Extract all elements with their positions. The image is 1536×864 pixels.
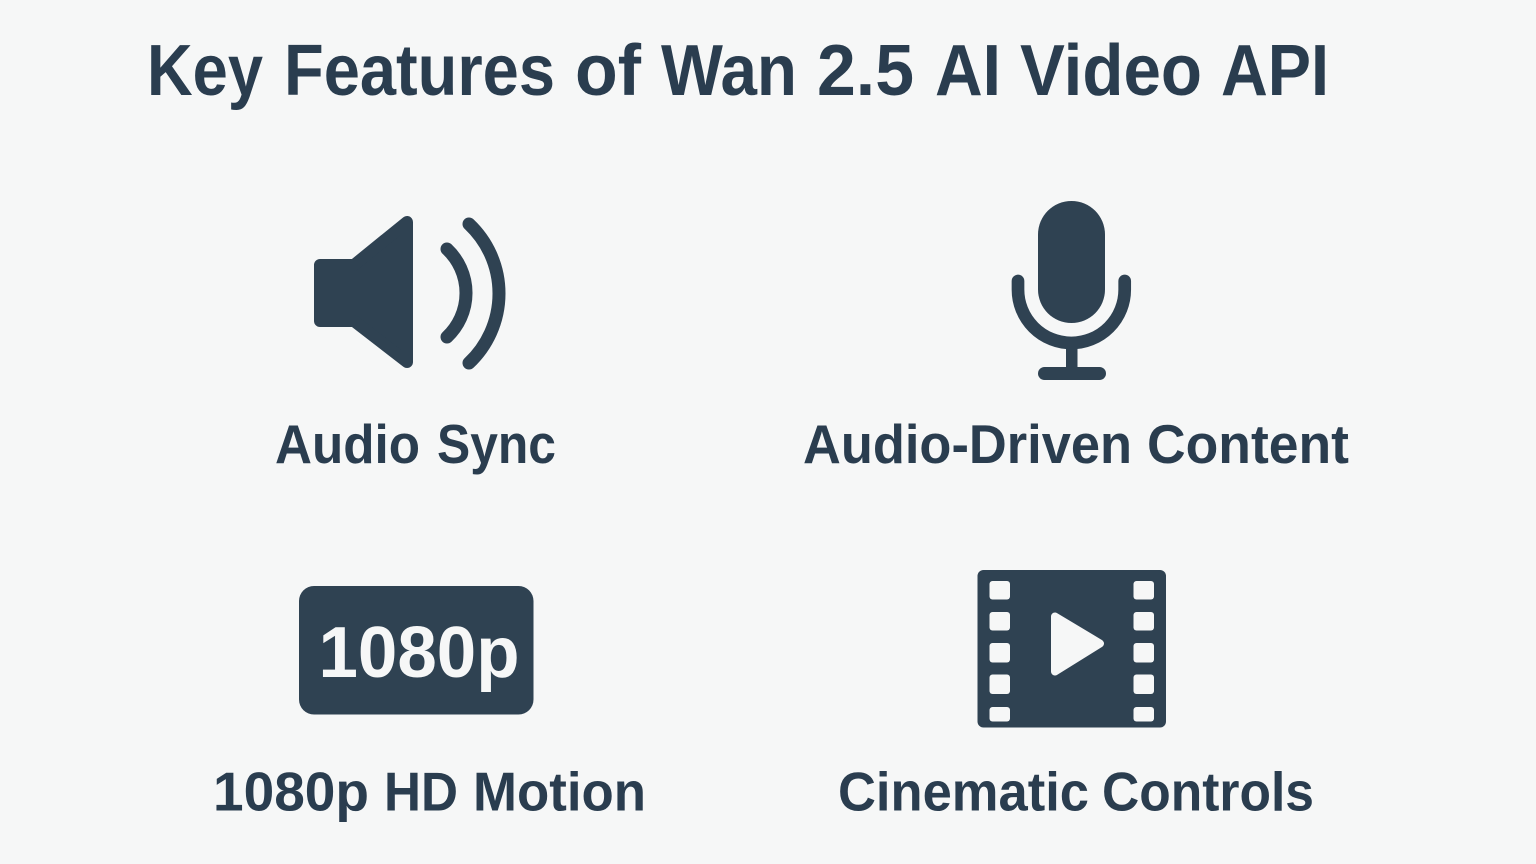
title	[147, 31, 1329, 111]
icon: 1080p badge	[299, 586, 534, 714]
label: 1080p HD Motion	[213, 760, 646, 822]
title: AI	[935, 31, 1001, 111]
title: 2.5	[817, 31, 914, 111]
title: Video	[1020, 31, 1202, 111]
label: Audio-Driven Content	[803, 413, 1349, 475]
title: of	[575, 31, 642, 111]
label: 1080p HD Motion: 1080p	[213, 760, 369, 822]
label: Cinematic Controls	[838, 760, 1314, 822]
label: Cinematic Controls: Cinematic	[838, 760, 1089, 822]
label: 1080p HD Motion: Motion	[473, 760, 646, 822]
label: Cinematic Controls: Controls	[1102, 760, 1314, 822]
icon: film strip with play button	[978, 570, 1166, 728]
label: Audio-Driven Content: Content	[1147, 413, 1349, 475]
title: API	[1221, 31, 1329, 111]
label: Audio Sync: Sync	[437, 413, 556, 475]
label: Audio Sync: Audio	[275, 413, 420, 475]
icon: speaker	[320, 222, 499, 363]
label: Audio-Driven Content: Audio-Driven	[803, 413, 1132, 475]
title: Features	[284, 31, 555, 111]
label: 1080p HD Motion: HD	[384, 760, 458, 822]
title: Key	[147, 31, 263, 111]
icon: 1080p badge: 1080p	[318, 613, 520, 693]
icon: microphone	[1018, 201, 1125, 380]
title: Wan	[661, 31, 797, 111]
label: Audio Sync	[275, 413, 556, 475]
